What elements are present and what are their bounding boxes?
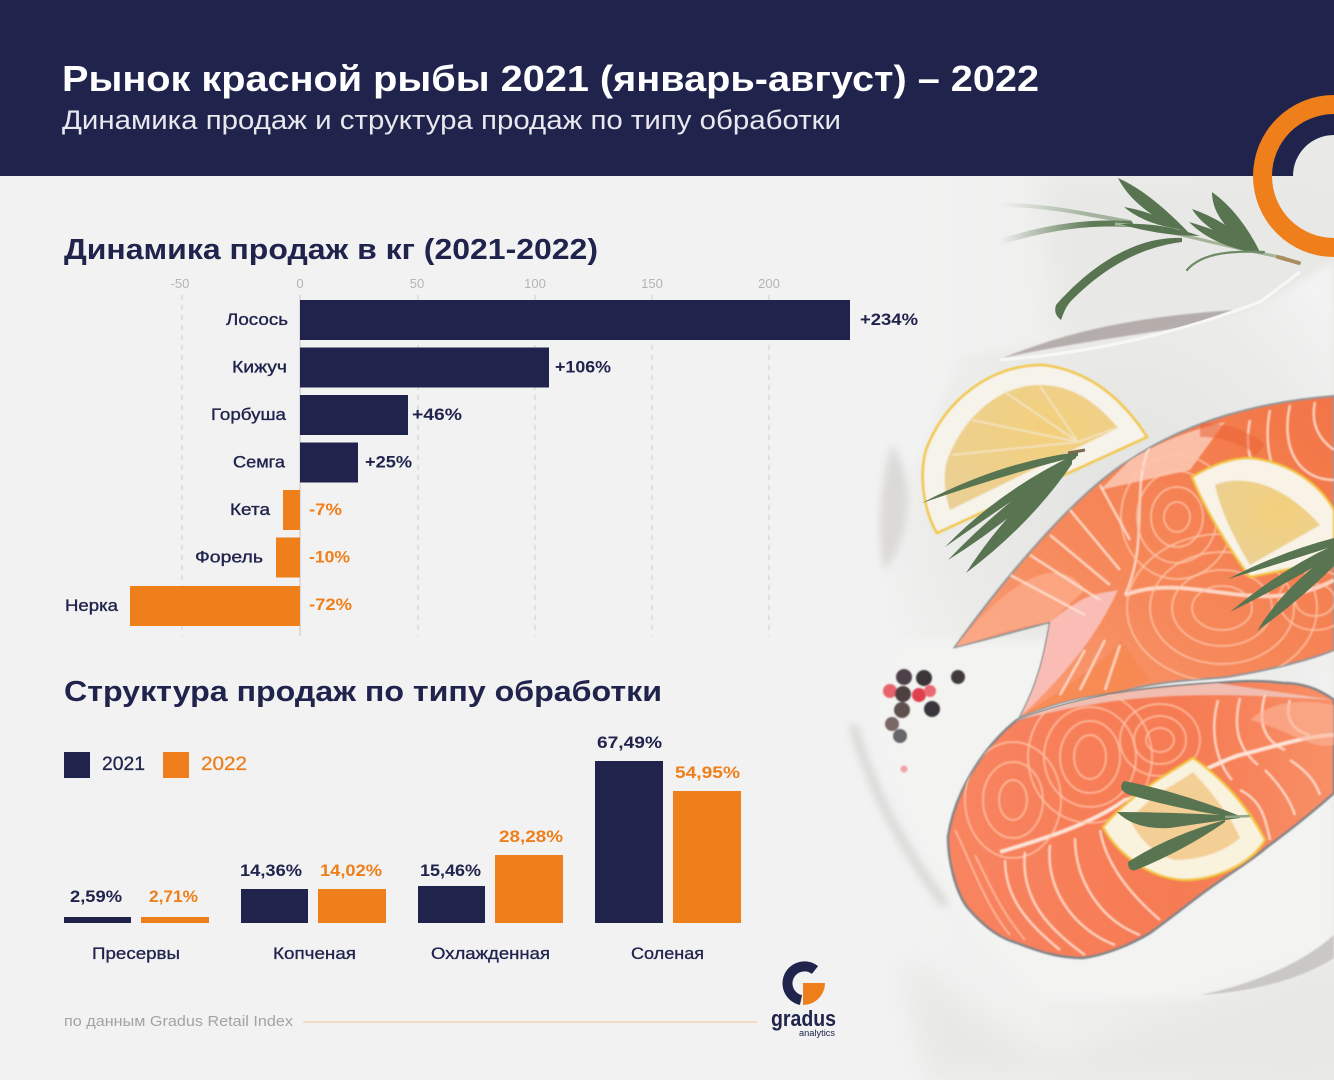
logo: gradus analytics: analytics: [799, 1028, 836, 1038]
group: Охлажденная: [418, 827, 563, 963]
header band: [0, 0, 1334, 176]
row: Семга: +25%: [365, 452, 412, 472]
row: Нерка: -72%: [309, 595, 352, 614]
row: Лосось: [226, 300, 918, 340]
icon: lemon wedge on lower steak: [1103, 758, 1265, 880]
row: Кижуч: [232, 348, 611, 388]
icon: lemon rosemary sprig: [922, 450, 1085, 573]
photo: salmon steaks on a white plate: [850, 176, 1334, 1080]
group: Соленая: 67,49%: [597, 733, 662, 752]
group: Пресервы: [64, 887, 209, 963]
group: Копченая: [240, 861, 386, 963]
row: Горбуша: Горбуша: [211, 406, 287, 424]
heading: sales structure: Структура продаж по типу обработки: [64, 676, 662, 708]
icon: upper salmon steak: [955, 396, 1334, 717]
icon: rosemary on lower steak: [1117, 781, 1250, 870]
row: Горбуша: [211, 395, 462, 435]
decorative ring icon: [1253, 95, 1334, 257]
group: Пресервы: 2,59%: [70, 887, 122, 906]
row: Кижуч: Кижуч: [232, 358, 287, 376]
row: Кижуч: +106%: [555, 358, 611, 376]
main title: Рынок красной рыбы 2021 (январь-август) – 2022: [62, 58, 1039, 99]
row: Лосось: Лосось: [226, 311, 288, 329]
axis tick labels: 200: [758, 276, 780, 291]
row: Горбуша: +46%: [412, 405, 462, 424]
group: Копченая: Копченая: [273, 944, 356, 963]
row: Семга: [233, 442, 412, 482]
group: Копченая: 14,02%: [320, 861, 382, 880]
row: Лосось: +234%: [860, 310, 918, 329]
subtitle: Динамика продаж и структура продаж по типу обработки: [62, 105, 841, 135]
logo: gradus analytics: [771, 966, 836, 1038]
row: Форель: Форель: [195, 548, 263, 566]
group: Охлажденная: 15,46%: [420, 861, 481, 880]
row: Кета: [230, 490, 342, 530]
row: Форель: -10%: [309, 548, 350, 566]
heading: sales dynamics: Динамика продаж в кг (2021-2022): [64, 234, 598, 266]
row: Нерка: Нерка: [65, 597, 119, 615]
plate rim streak: [1003, 310, 1233, 358]
group: Соленая: 54,95%: [675, 763, 740, 782]
row: Форель: [195, 538, 350, 578]
group: Пресервы: 2,71%: [149, 887, 198, 906]
row: Кета: Кета: [230, 501, 271, 519]
axis tick labels: 50: [410, 276, 424, 291]
bar chart: sales structure by processing type: [64, 733, 741, 963]
icon: top rosemary sprig: [1000, 178, 1299, 320]
icon: lower salmon steak: [948, 681, 1334, 958]
group: Копченая: 14,36%: [240, 861, 302, 880]
icon: lemon wedge on upper steak: [1192, 458, 1334, 577]
icon: peppercorns: [883, 669, 965, 772]
source note: по данным Gradus Retail Index: [64, 1013, 294, 1030]
group: Соленая: Соленая: [631, 944, 704, 963]
icon: rosemary on upper steak: [1228, 538, 1334, 631]
legend: 2021: [102, 754, 145, 775]
axis tick labels: 0: [296, 276, 304, 291]
row: Семга: Семга: [233, 454, 286, 472]
row: Кета: -7%: [309, 500, 342, 519]
bar chart: sales dynamics in kg: [65, 276, 918, 636]
logo: gradus analytics: gradus: [771, 1006, 836, 1031]
axis tick labels: 100: [524, 276, 546, 291]
group: Соленая: [595, 733, 741, 963]
row: Нерка: [65, 586, 352, 626]
legend: [64, 752, 247, 778]
group: Охлажденная: Охлажденная: [431, 944, 550, 963]
group: Охлажденная: 28,28%: [499, 827, 563, 846]
axis tick labels: -50: [171, 276, 189, 291]
group: Пресервы: Пресервы: [92, 944, 180, 963]
axis tick labels: 150: [641, 276, 663, 291]
icon: half lemon slice on plate: [923, 365, 1147, 533]
legend: 2022: [201, 754, 247, 775]
axis tick labels: [171, 276, 780, 291]
